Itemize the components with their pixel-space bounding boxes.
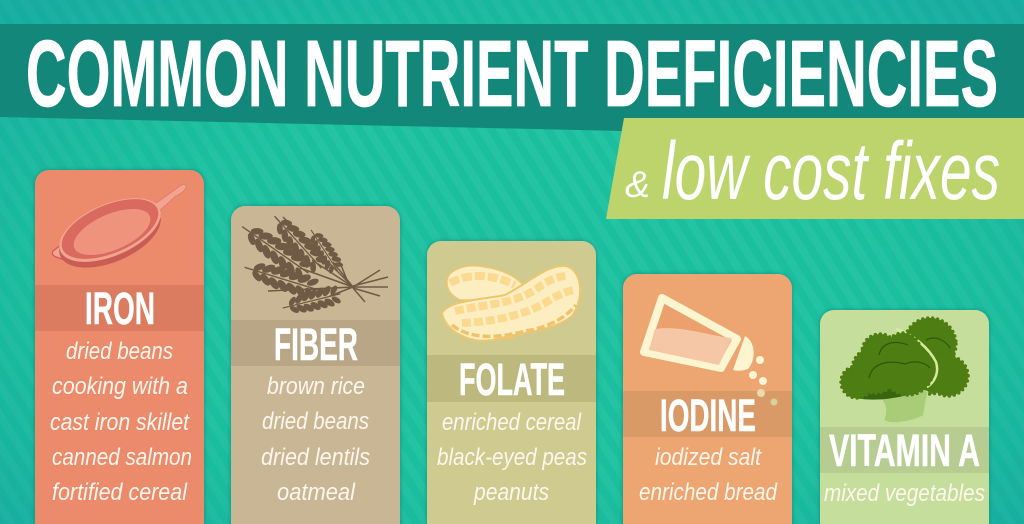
panel: iron xyxy=(35,170,204,524)
icon: salt grains xyxy=(749,356,778,406)
heading: iodine: IODINE xyxy=(660,390,756,441)
fixes: vitamin a: mixed vegetables xyxy=(824,480,985,507)
fixes: fiber xyxy=(261,373,370,506)
heading band xyxy=(231,320,400,366)
icon: peanut xyxy=(442,266,580,341)
fixes: fiber: dried lentils xyxy=(261,444,370,471)
panel: iodine xyxy=(623,274,792,524)
fixes: iron xyxy=(50,338,192,506)
icon: salt shaker xyxy=(644,298,754,371)
icon: wheat xyxy=(234,207,388,320)
heading band xyxy=(623,391,792,437)
panel: folate xyxy=(427,241,596,524)
fixes: iodine: iodized salt xyxy=(655,444,762,471)
panel: fiber xyxy=(231,206,400,524)
heading band xyxy=(427,355,596,402)
heading band xyxy=(820,427,989,473)
icon: skillet xyxy=(50,184,186,281)
fixes: fiber: brown rice xyxy=(267,373,365,400)
fixes: iron: cooking with a xyxy=(52,373,188,400)
fixes: iron: cast iron skillet xyxy=(50,409,190,436)
icon: broccoli xyxy=(841,318,968,423)
fixes: iron: dried beans xyxy=(66,338,173,365)
fixes: iron: fortified cereal xyxy=(52,479,188,506)
heading: folate: FOLATE xyxy=(459,354,565,405)
fixes: fiber: dried beans xyxy=(262,408,369,435)
heading band xyxy=(35,285,204,331)
fixes: folate: peanuts xyxy=(473,479,549,506)
subtitle panel xyxy=(606,118,1024,219)
fixes: iodine xyxy=(639,444,778,506)
ampersand: & xyxy=(625,164,650,205)
panel: vitamin a xyxy=(820,310,989,524)
fixes: folate xyxy=(437,409,587,506)
fixes: folate: enriched cereal xyxy=(442,409,582,436)
heading: fiber: FIBER xyxy=(274,319,358,370)
fixes: folate: black-eyed peas xyxy=(437,444,587,471)
fixes: iron: canned salmon xyxy=(52,444,192,471)
title banner xyxy=(0,24,1024,131)
fixes: iodine: enriched bread xyxy=(639,479,778,506)
heading: iron: IRON xyxy=(85,283,155,334)
fixes: fiber: oatmeal xyxy=(277,479,356,506)
